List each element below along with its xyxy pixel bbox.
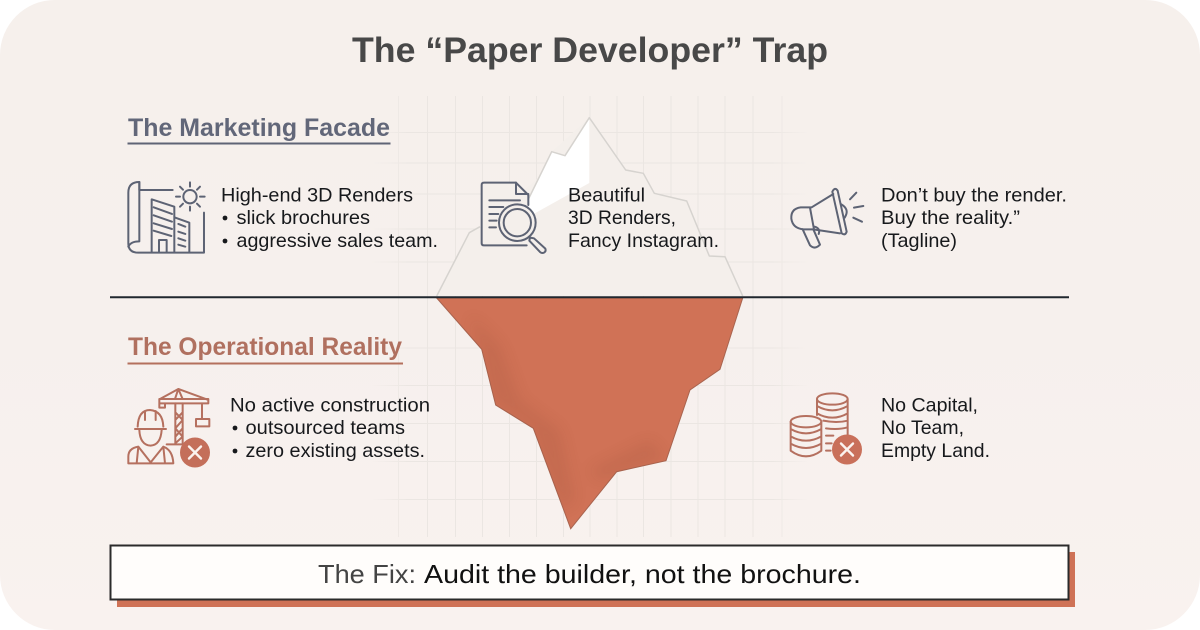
iceberg above water — [437, 118, 743, 296]
icon: document and magnifier — [482, 183, 546, 253]
icon: worker and crane — [128, 389, 209, 463]
title: The “Paper Developer” Trap — [352, 30, 828, 70]
icon: megaphone — [791, 189, 863, 248]
heading: marketing facade: The Marketing Facade — [128, 114, 390, 142]
text: marketing facade features: High-end 3D Renders — [221, 184, 413, 206]
text: beautiful renders: Fancy Instagram. — [568, 230, 719, 252]
text: beautiful renders: Beautiful — [568, 184, 645, 206]
text: marketing facade features: aggressive sales team. — [236, 230, 438, 252]
text: marketing facade features: slick brochures — [236, 207, 370, 229]
text: tagline — [881, 184, 1067, 252]
background grid — [396, 96, 786, 537]
callout: the fix: The Fix: — [318, 559, 416, 589]
text: operational reality features — [230, 394, 430, 462]
text: tagline: (Tagline) — [881, 230, 957, 252]
icon: error badge worker — [180, 438, 210, 468]
text: marketing facade features — [221, 184, 438, 252]
callout: the fix: Audit the builder, not the brochure. — [424, 559, 861, 589]
text: operational reality features: zero existing assets. — [246, 440, 425, 462]
icon: blueprint building — [128, 182, 205, 253]
text: no capital: No Capital, — [881, 394, 978, 416]
text: tagline: Don’t buy the render. — [881, 184, 1067, 206]
text: beautiful renders — [568, 184, 719, 252]
text: no capital — [881, 394, 990, 462]
waterline — [110, 296, 1069, 298]
text: beautiful renders: 3D Renders, — [568, 207, 676, 229]
icon: coin stacks — [791, 393, 848, 456]
text: no capital: Empty Land. — [881, 440, 990, 462]
text: operational reality features: No active construction — [230, 394, 430, 416]
iceberg below water — [437, 298, 743, 529]
text: operational reality features: outsourced teams — [246, 417, 405, 439]
callout: the fix — [110, 546, 1075, 607]
text: tagline: Buy the reality.” — [881, 207, 1020, 229]
text: no capital: No Team, — [881, 417, 964, 439]
icon: error badge coins — [832, 434, 862, 464]
heading: operational reality: The Operational Reality — [128, 333, 402, 361]
